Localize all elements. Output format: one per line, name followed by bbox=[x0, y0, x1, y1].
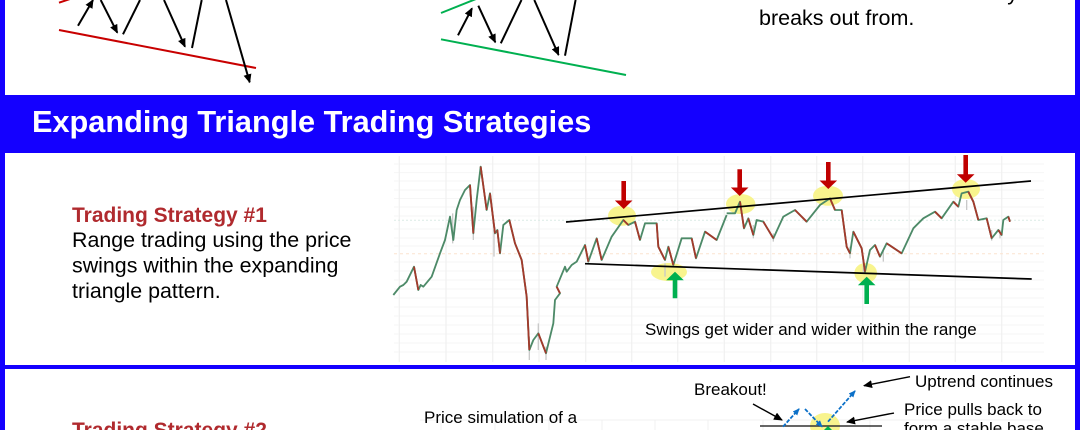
blue dashed price path bbox=[783, 391, 855, 427]
yellow highlight bbox=[810, 413, 840, 430]
callout: price pulls back bbox=[847, 400, 1044, 430]
callout: price pulls back: Price pulls back to bbox=[904, 400, 1042, 419]
chart: price simulation bbox=[420, 372, 1053, 430]
red arrows at swing highs bbox=[615, 155, 974, 209]
text: trading strategy 1: Trading Strategy #1 bbox=[72, 204, 267, 227]
yellow highlight ellipses bbox=[608, 179, 980, 283]
breakout level bbox=[760, 425, 882, 427]
text: trading strategy 1: Range trading using the price bbox=[72, 228, 351, 252]
text: trading strategy 1: swings within the expanding bbox=[72, 254, 338, 278]
text: breakout note: breaks out from. bbox=[759, 6, 914, 30]
diagram: bullish expanding triangle bbox=[441, 0, 626, 75]
simulation caption: Price simulation of a bbox=[424, 408, 578, 427]
chart caption: Swings get wider and wider within the range bbox=[645, 320, 977, 339]
text: trading strategy 1: triangle pattern. bbox=[72, 279, 221, 303]
text: breakout note bbox=[759, 0, 1018, 30]
trend lines bbox=[566, 181, 1032, 279]
price line right part bbox=[727, 192, 1010, 273]
heading band bbox=[0, 95, 1080, 153]
price line left part bbox=[393, 167, 727, 360]
heading band: Expanding Triangle Trading Strategies bbox=[32, 104, 591, 139]
diagram: bearish expanding triangle bbox=[59, 0, 256, 82]
text: trading strategy 1 bbox=[72, 204, 351, 303]
chart: price chart with expanding range bbox=[393, 155, 1044, 362]
green arrows at swing lows bbox=[666, 272, 876, 304]
green marker bbox=[823, 426, 833, 430]
callout: uptrend continues: Uptrend continues bbox=[915, 372, 1053, 391]
callout: breakout bbox=[694, 380, 782, 420]
callout: breakout: Breakout! bbox=[694, 380, 767, 399]
